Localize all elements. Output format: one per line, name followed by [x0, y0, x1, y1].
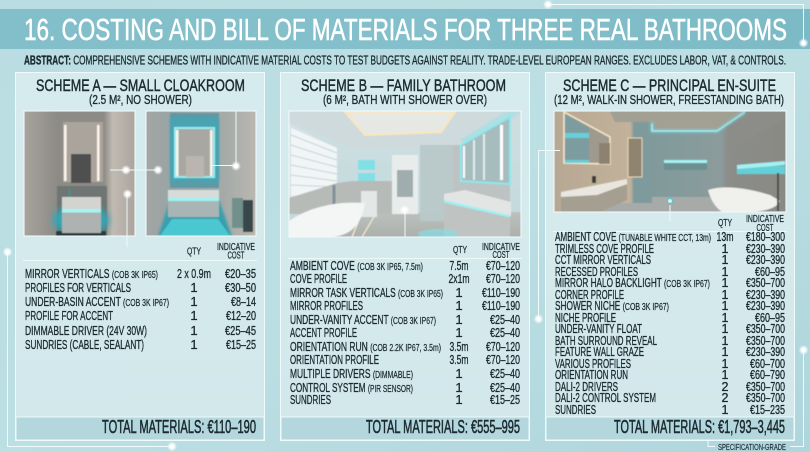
table: scheme B: ORIENTATION RUN (COB 2.2K IP67, 3.5m)	[290, 339, 441, 354]
table: scheme C	[553, 213, 787, 417]
table: scheme A: €15–25	[226, 337, 256, 352]
panel: scheme C	[546, 72, 794, 440]
table: scheme A: €30–50	[225, 280, 256, 295]
photo: principal en-suite	[554, 111, 786, 212]
table: scheme B: 1	[455, 392, 463, 407]
table: scheme C: €180–300	[746, 230, 785, 244]
table: scheme A: DIMMABLE DRIVER (24V 30W)	[25, 323, 147, 338]
table: scheme C: €230–390	[746, 345, 785, 359]
table: scheme A: SUNDRIES (CABLE, SEALANT)	[25, 337, 144, 352]
table: scheme B: 1	[455, 366, 463, 381]
table: scheme B: COST	[492, 249, 510, 261]
table: scheme C: QTY	[718, 217, 732, 229]
total: scheme A: TOTAL MATERIALS: €110–190	[102, 417, 256, 437]
scheme B subheading: (6 M², BATH WITH SHOWER OVER)	[323, 92, 487, 107]
table: scheme A: 1	[190, 323, 198, 338]
table: scheme A: €20–35	[225, 266, 256, 281]
table: scheme C: €60–790	[750, 368, 785, 382]
scheme A heading: SCHEME A — SMALL CLOAKROOM	[36, 76, 245, 95]
table: scheme B: 1	[455, 380, 463, 395]
table: scheme C: 13m	[716, 230, 734, 244]
table: scheme C: €350–700	[746, 276, 785, 290]
panel: scheme A	[16, 72, 264, 440]
table: scheme C: SHOWER NICHE (COB 3K IP67)	[555, 299, 669, 313]
total: scheme B: TOTAL MATERIALS: €555–995	[366, 417, 520, 437]
table: scheme C: COST	[756, 222, 774, 234]
table: scheme B: ACCENT PROFILE	[290, 325, 357, 340]
photo: cloakroom warm	[24, 111, 135, 236]
table: scheme C: 1	[722, 299, 729, 313]
table: scheme C: SUNDRIES	[555, 403, 596, 417]
table: scheme B: €70–120	[486, 258, 520, 273]
table: scheme C: 1	[722, 368, 729, 382]
table: scheme C: CORNER PROFILE	[555, 288, 624, 302]
table: scheme B: €25–40	[490, 325, 520, 340]
table: scheme C: DALI-2 DRIVERS	[555, 380, 618, 394]
table: scheme B	[288, 241, 522, 407]
table: scheme C: FEATURE WALL GRAZE	[555, 345, 644, 359]
connectors on photos	[110, 111, 241, 247]
photo: cloakroom cyan	[146, 111, 256, 236]
table: scheme B: 2x1m	[448, 271, 470, 286]
table: scheme C: TRIMLESS COVE PROFILE	[555, 242, 654, 256]
table: scheme B: €70–120	[486, 271, 520, 286]
table: scheme A: €12–20	[226, 308, 256, 323]
table: scheme A: UNDER-BASIN ACCENT (COB 3K IP67)	[25, 294, 169, 309]
table: scheme C: €350–700	[746, 391, 785, 405]
table: scheme C: 1	[722, 253, 729, 267]
table: scheme A: QTY	[187, 246, 201, 258]
table: scheme C: UNDER-VANITY FLOAT	[555, 322, 642, 336]
table: scheme B: 1	[455, 285, 463, 300]
table: scheme C: €350–700	[746, 334, 785, 348]
table: scheme A: 1	[190, 308, 198, 323]
table: scheme C: 1	[722, 334, 729, 348]
table: scheme C: €230–390	[746, 288, 785, 302]
table: scheme C: 1	[722, 288, 729, 302]
table: scheme C: 1	[722, 322, 729, 336]
table: scheme A: COST	[228, 250, 245, 262]
table: scheme A: INDICATIVE	[217, 241, 255, 253]
table: scheme B: €25–40	[490, 380, 520, 395]
table: scheme C: €60–700	[750, 357, 785, 371]
table: scheme C: DALI-2 CONTROL SYSTEM	[555, 391, 656, 405]
table: scheme C: 1	[722, 345, 729, 359]
table: scheme B: €70–120	[486, 339, 520, 354]
table: scheme C: INDICATIVE	[746, 213, 784, 225]
table: scheme A	[23, 241, 257, 352]
table: scheme B: CONTROL SYSTEM (PIR SENSOR)	[290, 380, 413, 395]
table: scheme A: MIRROR VERTICALS (COB 3K IP65)	[25, 266, 158, 281]
table: scheme C: 2	[722, 391, 729, 405]
scheme B heading: SCHEME B — FAMILY BATHROOM	[301, 76, 506, 95]
table: scheme A: €25–45	[225, 323, 256, 338]
table: scheme A: PROFILE FOR ACCENT	[25, 308, 113, 323]
table: scheme C: 1	[722, 276, 729, 290]
table: scheme C: AMBIENT COVE (TUNABLE WHITE CCT, 13m)	[555, 230, 711, 244]
table: scheme B: INDICATIVE	[482, 241, 520, 253]
table: scheme C: VARIOUS PROFILES	[555, 357, 631, 371]
table: scheme C: CCT MIRROR VERTICALS	[555, 253, 651, 267]
connector on photo	[400, 205, 410, 237]
table: scheme B: AMBIENT COVE (COB 3K IP65, 7.5m)	[290, 258, 423, 273]
table: scheme C: ORIENTATION RUN	[555, 368, 628, 382]
title band	[0, 9, 810, 49]
table: scheme C: MIRROR HALO BACKLIGHT (COB 3K IP67)	[555, 276, 710, 290]
table: scheme A: 1	[190, 294, 198, 309]
table: scheme B: 7.5m	[450, 258, 468, 273]
table: scheme B: €25–40	[490, 312, 520, 327]
panel: scheme B	[280, 72, 530, 440]
table: scheme C: €60–95	[755, 265, 785, 279]
table: scheme B: €70–120	[486, 352, 520, 367]
table: scheme B: €15–25	[490, 392, 520, 407]
table: scheme C: RECESSED PROFILES	[555, 265, 638, 279]
table: scheme B: 1	[455, 325, 463, 340]
table: scheme A: €8–14	[231, 294, 256, 309]
connector on photo	[668, 198, 672, 221]
table: scheme B: 3.5m	[450, 339, 468, 354]
table: scheme B: QTY	[453, 244, 467, 256]
table: scheme B: SUNDRIES	[290, 392, 331, 407]
table: scheme C: €230–390	[746, 253, 785, 267]
table: scheme B: €25–40	[490, 366, 520, 381]
total: scheme C	[546, 417, 794, 440]
table: scheme C: 1	[722, 265, 729, 279]
table: scheme C: BATH SURROUND REVEAL	[555, 334, 657, 348]
table: scheme B: 3.5m	[450, 352, 468, 367]
table: scheme B: €110–190	[482, 285, 520, 300]
table: scheme B: COVE PROFILE	[290, 271, 347, 286]
table: scheme C: €230–390	[746, 242, 785, 256]
table: scheme C: 1	[722, 311, 729, 325]
total: scheme B	[281, 417, 529, 440]
table: scheme C: 1	[722, 403, 729, 417]
table: scheme B: MIRROR PROFILES	[290, 298, 363, 313]
table: scheme A: PROFILES FOR VERTICALS	[25, 280, 131, 295]
table: scheme B: MIRROR TASK VERTICALS (COB 3K IP65)	[290, 285, 443, 300]
table: scheme C: 2	[722, 380, 729, 394]
table: scheme A: 2 x 0.9m	[177, 266, 211, 281]
total: scheme A	[16, 417, 264, 440]
table: scheme B: MULTIPLE DRIVERS (DIMMABLE)	[290, 366, 413, 381]
table: scheme A: 1	[190, 280, 198, 295]
table: scheme C: €60–95	[755, 311, 785, 325]
scheme A subheading: (2.5 M², NO SHOWER)	[89, 92, 192, 107]
table: scheme C: NICHE PROFILE	[555, 311, 616, 325]
table: scheme C: €230–390	[746, 299, 785, 313]
table: scheme B: €110–190	[482, 298, 520, 313]
table: scheme B: UNDER-VANITY ACCENT (COB 3K IP67)	[290, 312, 436, 327]
table: scheme C: €350–700	[746, 322, 785, 336]
table: scheme C: 1	[722, 242, 729, 256]
table: scheme B: ORIENTATION PROFILE	[290, 352, 379, 367]
photo: family bathroom	[289, 111, 521, 239]
table: scheme B: 1	[455, 312, 463, 327]
table: scheme C: €350–700	[746, 380, 785, 394]
table: scheme A: 1	[190, 337, 198, 352]
table: scheme C: 1	[722, 357, 729, 371]
table: scheme B: 1	[455, 298, 463, 313]
table: scheme C: €15–235	[750, 403, 785, 417]
